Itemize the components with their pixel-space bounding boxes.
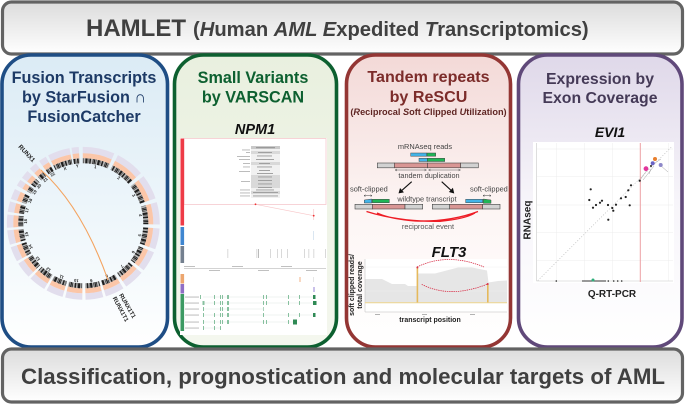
label: mRNAseq reads: mRNAseq reads [398,142,452,151]
label: wildtype transcript: wildtype transcript [396,194,457,204]
arrow right [442,182,454,193]
label: soft-clipped right: soft-clipped [470,185,508,194]
panel: tandem repeats [346,55,510,347]
panel: small variants [174,55,336,347]
annotation marks [299,277,315,292]
genomic axis [184,266,326,271]
chart: scatter plot [533,142,674,283]
chart: circos plot: 5 [137,234,143,238]
gene title: EVI1: EVI1 [595,124,625,140]
chart: circos plot: 4 [138,214,143,217]
chart: genome browser tracks [180,138,327,335]
arrow left [399,182,412,193]
heading: expression by exon coverage: Exon Coverage [542,90,658,107]
gene models [185,295,316,330]
heading: fusion transcripts: by StarFusion ∩ [22,88,146,106]
diagram: tandem duplication schematic [350,142,508,231]
title: HAMLET [86,15,186,42]
heading: tandem repeats: Tandem repeats [367,68,490,86]
heading: tandem repeats: by ReSCU [390,88,467,106]
soft-clipped reads [364,199,491,203]
chart: circos plot: 11 [58,273,65,280]
clip arrows [364,195,491,197]
chart: circos plot: 18 [27,197,34,204]
reciprocal arcs [366,212,478,221]
chart: circos plot: 10 [73,278,79,283]
heading: small variants: by VARSCAN [202,88,304,106]
highlighted samples [592,157,668,282]
duplication span arrows [395,169,460,171]
gene title: NPM1: NPM1 [235,122,275,138]
heading: fusion transcripts: FusionCatcher [27,108,141,126]
conclusion text: Classification, prognostication and molecular targets of AML [21,364,665,389]
label: tandem duplication: tandem duplication [398,171,460,180]
chart: circos plot: 7 [119,264,125,269]
gene label: RUNX1: RUNX1 [17,144,37,164]
x axis label: transcript position [399,317,461,324]
y axis label: soft clipped reads/ [349,254,356,316]
chart: circos plot [10,144,156,324]
chart: circos plot: Y [76,163,79,168]
chart: circos plot: 20 [36,182,43,190]
heading: expression by exon coverage: Expression by [546,71,654,88]
gene title: FLT3: FLT3 [432,244,467,261]
data points [556,165,652,282]
panel: conclusion bar [2,349,682,402]
chart: circos plot: 22 [49,171,57,178]
y axis label: RNAseq: RNAseq [522,201,534,239]
chart: FLT3 coverage [365,259,507,315]
gene label: RUNX1T1 second: RUNX1T1 [111,296,129,324]
x axis label: Q-RT-PCR: Q-RT-PCR [588,289,637,300]
chart: circos plot: 13 [34,255,41,262]
chart: circos plot: 12 [45,266,52,273]
gene label: RUNX1T1: RUNX1T1 [117,293,136,320]
chart: circos plot: 15 [24,231,29,237]
heading: fusion transcripts: Fusion Transcripts [12,69,156,87]
chart: circos plot: X [63,166,67,171]
chart: circos plot: 21 [42,176,49,183]
reads [411,153,445,162]
panel: HAMLET title bar [2,2,682,54]
chart: circos plot: 1 [94,164,98,170]
chart: circos plot: 14 [27,243,34,250]
chart: circos plot: 3 [131,193,137,198]
variant points [255,203,315,240]
label: reciprocal event: reciprocal event [402,222,454,231]
chart: circos plot: 6 [130,250,136,255]
variant info table [237,146,280,198]
title: (Human AML Expedited Transcriptomics) [193,19,589,41]
fusion link arc [41,170,108,280]
panel: fusion transcripts [2,55,168,347]
chart: circos plot: 2 [116,175,122,181]
chart: circos plot: 19 [31,188,38,196]
panel: expression [518,55,682,347]
wildtype transcripts [355,204,500,209]
y axis label: total coverage [357,261,364,309]
subtitle: reciprocal soft clipped utilization: (Reciprocal Soft Clipped Utilization) [350,107,507,117]
chart: circos plot: 17 [24,207,30,213]
chart: circos plot: 9 [89,278,93,283]
duplicated transcript [377,163,478,168]
chart: circos plot: 8 [104,273,109,279]
heading: small variants: Small Variants [198,69,308,87]
label: soft-clipped left: soft-clipped [350,185,388,194]
chart: circos plot: 16 [23,218,28,224]
track ticks [228,249,326,258]
